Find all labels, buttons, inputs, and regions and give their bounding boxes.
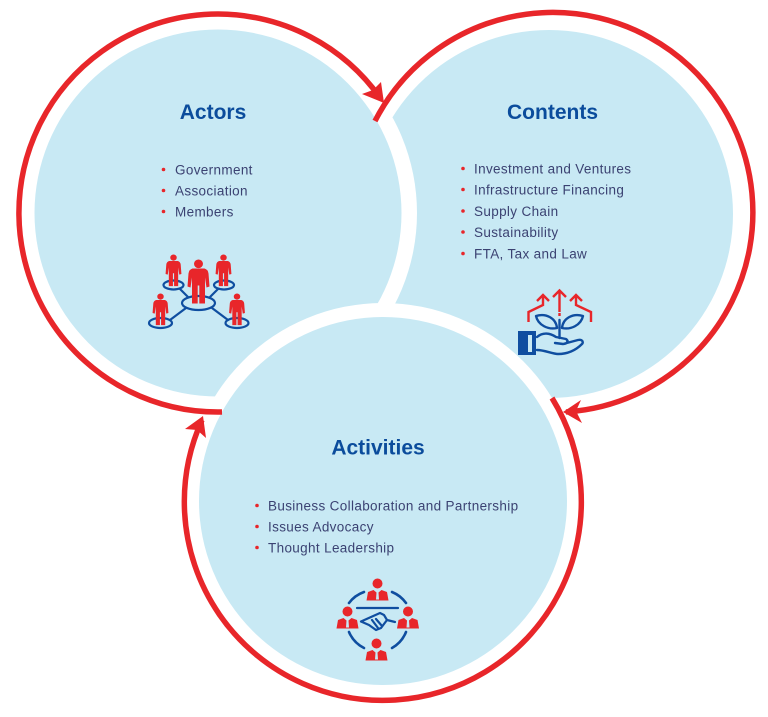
contents ring with arrow — [375, 12, 753, 423]
panel: actors disc — [34, 30, 402, 396]
heading: activities: Activities — [331, 436, 425, 460]
list: activities — [255, 498, 518, 556]
icon: hand with plant and arrows — [518, 290, 591, 355]
list: contents — [461, 162, 631, 262]
list: contents: FTA, Tax and Law — [474, 246, 587, 262]
list: contents: Investment and Ventures — [474, 162, 631, 176]
list: contents: Sustainability — [474, 225, 558, 240]
list: actors: Association — [175, 184, 248, 198]
list: contents: Supply Chain — [474, 204, 559, 219]
actors ring with arrow — [19, 14, 384, 412]
list: actors: Government — [175, 162, 253, 178]
icon: people network — [149, 254, 248, 328]
heading: actors: Actors — [180, 101, 246, 124]
panel: contents disc — [365, 30, 733, 398]
list: activities: Issues Advocacy — [268, 520, 374, 534]
list: activities: Business Collaboration and Partnership — [268, 498, 518, 514]
panel: activities disc — [199, 317, 567, 685]
list: actors — [162, 162, 253, 220]
list: activities: Thought Leadership — [268, 540, 394, 556]
activities ring with arrow — [184, 398, 581, 700]
list: actors: Members — [175, 204, 234, 220]
list: contents: Infrastructure Financing — [474, 182, 624, 198]
heading: contents: Contents — [507, 101, 598, 124]
icon: handshake circle — [336, 578, 419, 660]
